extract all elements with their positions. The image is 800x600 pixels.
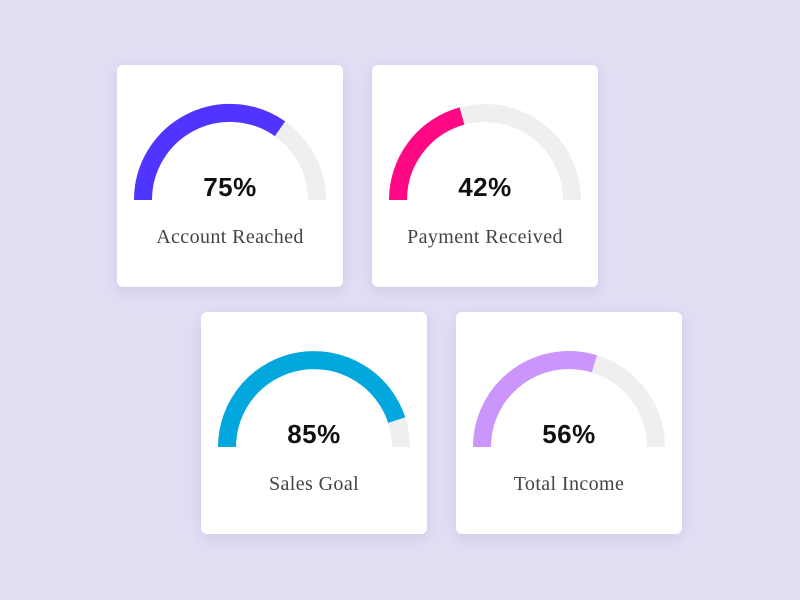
card: account reached — [117, 65, 343, 287]
value: 75% — [203, 172, 257, 202]
value: 85% — [287, 419, 341, 449]
value: 56% — [542, 419, 596, 449]
label: Account Reached — [156, 226, 304, 248]
label: Sales Goal — [269, 473, 359, 495]
card: sales goal — [201, 312, 427, 534]
value: 42% — [458, 172, 512, 202]
gauge: 56% — [473, 351, 665, 447]
card: payment received — [372, 65, 598, 287]
gauge: 75% — [134, 104, 326, 200]
card: total income — [456, 312, 682, 534]
gauge: 42% — [389, 104, 581, 200]
label: Payment Received — [407, 226, 563, 248]
label: Total Income — [514, 473, 624, 495]
gauge: 85% — [218, 351, 410, 447]
